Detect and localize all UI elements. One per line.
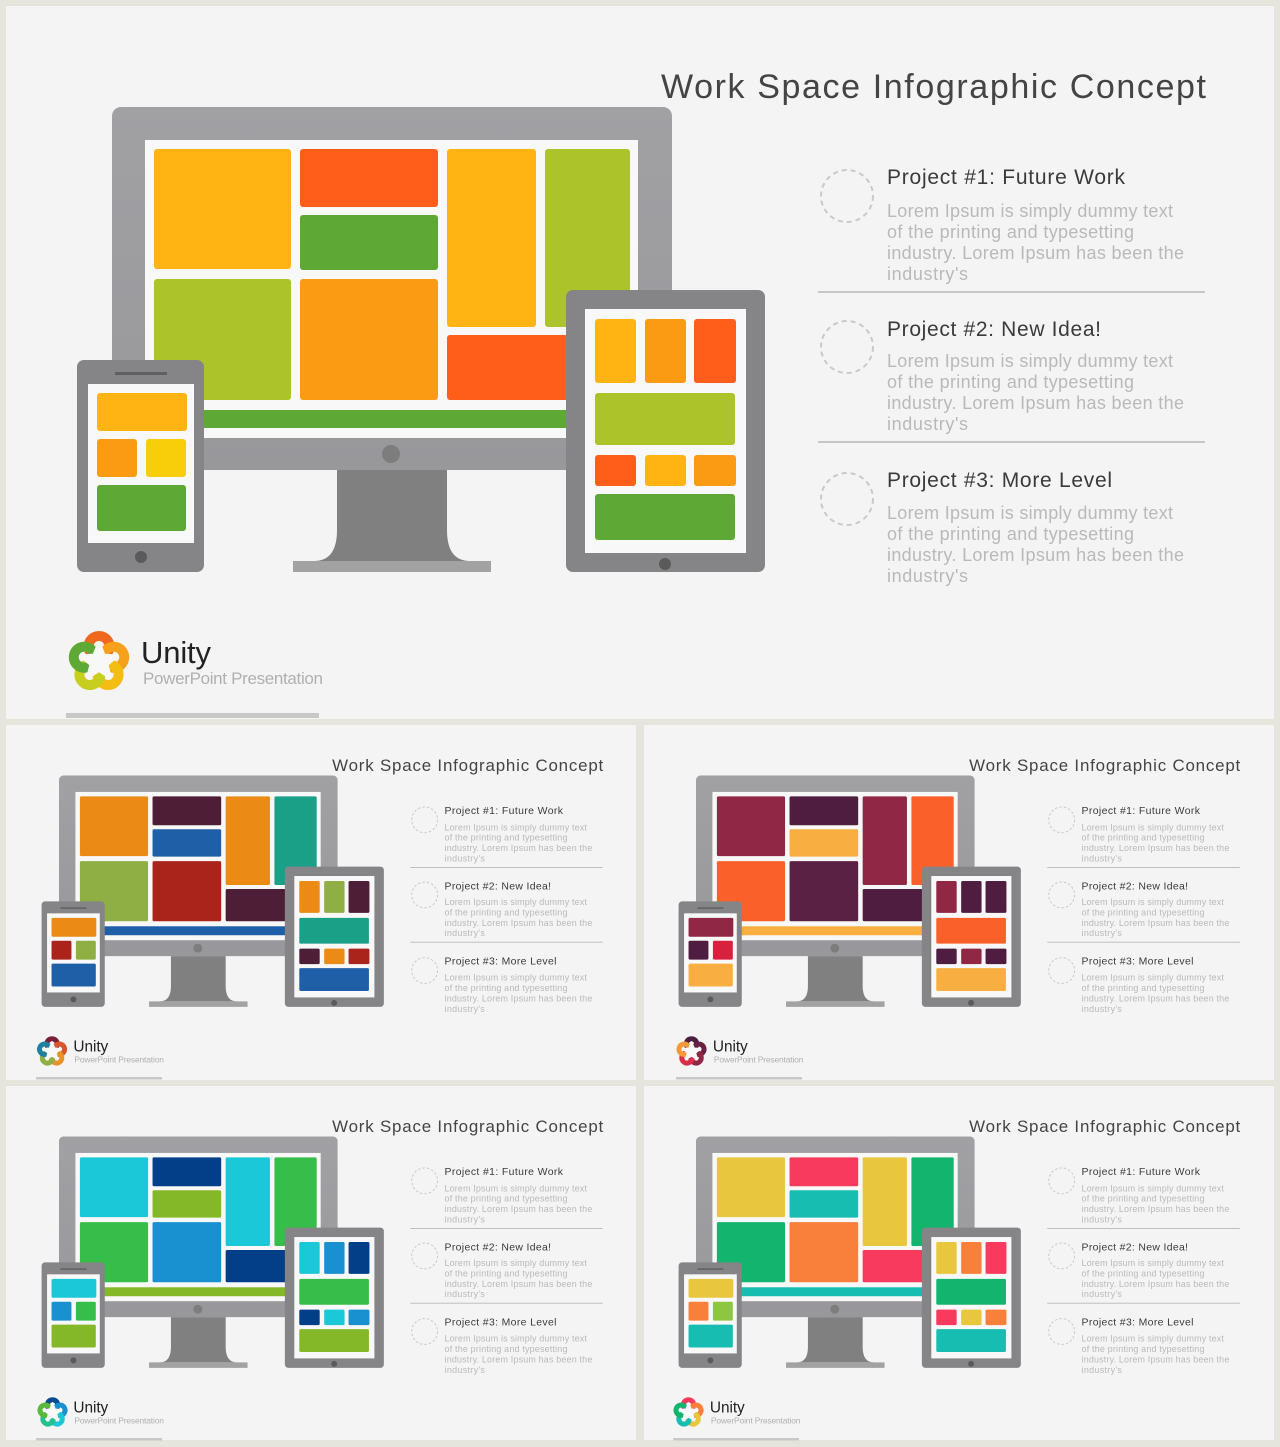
project 3: of the printing and typesetting: [887, 524, 1134, 544]
project 3: industry. Lorem Ipsum has been the: [887, 545, 1184, 565]
project 3: [821, 469, 1184, 586]
project 3: industry. Lorem Ipsum has been the: [445, 993, 592, 1003]
project 3: of the printing and typesetting: [1082, 983, 1204, 993]
monitor: [112, 107, 672, 572]
project 3: [412, 957, 592, 1014]
logo: [673, 1400, 801, 1441]
panel: variant slide, maroon palette: [644, 725, 1274, 1080]
project 3: [412, 1318, 592, 1375]
project 2: [1047, 881, 1240, 942]
title: Work Space Infographic Concept: [661, 68, 1207, 106]
project 3: Project #3: More Level: [445, 957, 557, 968]
project 1: Project #1: Future Work: [1082, 1167, 1201, 1178]
project 2: industry's: [887, 414, 968, 434]
project 1: of the printing and typesetting: [1082, 1194, 1204, 1204]
logo: Unity: [73, 1039, 109, 1056]
project 3: [1049, 957, 1229, 1014]
logo: PowerPoint Presentation: [711, 1416, 801, 1426]
project 3: industry's: [887, 566, 968, 586]
project 1: Project #1: Future Work: [445, 806, 564, 817]
phone: [42, 1262, 105, 1368]
project 2: Project #2: New Idea!: [1082, 1242, 1188, 1253]
tablet: [566, 290, 765, 572]
monitor: [696, 1137, 975, 1368]
project 1: Lorem Ipsum is simply dummy text: [1082, 822, 1224, 832]
title: Work Space Infographic Concept: [969, 756, 1241, 775]
title: Work Space Infographic Concept: [969, 1117, 1241, 1136]
project 1: Lorem Ipsum is simply dummy text: [887, 201, 1173, 221]
project 1: of the printing and typesetting: [887, 222, 1134, 242]
logo: [36, 1400, 164, 1441]
project 1: [1047, 1167, 1240, 1229]
project 1: [818, 166, 1205, 292]
logo: [676, 1039, 804, 1080]
logo: PowerPoint Presentation: [74, 1416, 164, 1426]
tablet: [922, 867, 1021, 1007]
project 3: industry's: [1082, 1004, 1122, 1014]
project 1: of the printing and typesetting: [445, 833, 567, 843]
project 2: industry. Lorem Ipsum has been the: [1082, 1279, 1229, 1289]
project 1: industry. Lorem Ipsum has been the: [445, 843, 592, 853]
phone: [679, 1262, 742, 1368]
panel: variant slide, bright multicolour palette: [644, 1086, 1274, 1441]
project 1: industry's: [445, 854, 485, 864]
project 3: industry's: [1082, 1365, 1122, 1375]
logo: PowerPoint Presentation: [143, 669, 323, 688]
project 1: of the printing and typesetting: [1082, 833, 1204, 843]
project 3: Project #3: More Level: [445, 1318, 557, 1329]
project 3: Project #3: More Level: [887, 469, 1112, 492]
project 3: Project #3: More Level: [1082, 1318, 1194, 1329]
monitor: [59, 776, 338, 1007]
project 2: of the printing and typesetting: [445, 907, 567, 917]
logo: PowerPoint Presentation: [714, 1055, 804, 1065]
project 1: [410, 806, 603, 868]
project 3: Lorem Ipsum is simply dummy text: [1082, 1334, 1224, 1344]
project 2: [1047, 1242, 1240, 1303]
project 2: of the printing and typesetting: [1082, 1268, 1204, 1278]
project 2: Lorem Ipsum is simply dummy text: [887, 351, 1173, 371]
logo: [36, 1039, 164, 1080]
project 3: Project #3: More Level: [1082, 957, 1194, 968]
project 3: Lorem Ipsum is simply dummy text: [445, 1334, 587, 1344]
project 2: [818, 318, 1205, 442]
project 2: Project #2: New Idea!: [887, 318, 1101, 341]
phone: [42, 901, 105, 1007]
project 1: industry. Lorem Ipsum has been the: [887, 243, 1184, 263]
project 2: industry's: [1082, 1289, 1122, 1299]
project 3: of the printing and typesetting: [445, 1344, 567, 1354]
project 1: industry's: [445, 1215, 485, 1225]
project 3: industry's: [445, 1004, 485, 1014]
project 2: industry's: [445, 1289, 485, 1299]
project 1: [1047, 806, 1240, 868]
project 3: industry. Lorem Ipsum has been the: [445, 1354, 592, 1364]
project 2: Project #2: New Idea!: [445, 1242, 551, 1253]
monitor: [696, 776, 975, 1007]
project 1: industry. Lorem Ipsum has been the: [1082, 1204, 1229, 1214]
project 3: Lorem Ipsum is simply dummy text: [887, 503, 1173, 523]
panel: main slide: [6, 6, 1274, 719]
project 1: industry's: [887, 264, 968, 284]
project 1: [410, 1167, 603, 1229]
project 2: [410, 881, 603, 942]
project 2: industry. Lorem Ipsum has been the: [1082, 918, 1229, 928]
project 2: Lorem Ipsum is simply dummy text: [445, 897, 587, 907]
project 1: Lorem Ipsum is simply dummy text: [445, 1183, 587, 1193]
project 2: of the printing and typesetting: [887, 372, 1134, 392]
logo: Unity: [710, 1400, 745, 1417]
project 1: Project #1: Future Work: [445, 1167, 564, 1178]
phone: [679, 901, 742, 1007]
project 2: industry. Lorem Ipsum has been the: [445, 1279, 592, 1289]
project 1: industry's: [1082, 854, 1122, 864]
project 2: Lorem Ipsum is simply dummy text: [445, 1258, 587, 1268]
tablet: [922, 1228, 1021, 1368]
project 2: industry's: [445, 928, 485, 938]
project 1: Lorem Ipsum is simply dummy text: [445, 822, 587, 832]
project 2: industry. Lorem Ipsum has been the: [887, 393, 1184, 413]
title: Work Space Infographic Concept: [332, 756, 604, 775]
project 1: Project #1: Future Work: [887, 166, 1126, 189]
project 3: [1049, 1318, 1229, 1375]
phone: [77, 360, 204, 572]
logo: [66, 635, 323, 718]
monitor: [59, 1137, 338, 1368]
project 3: Lorem Ipsum is simply dummy text: [1082, 973, 1224, 983]
project 2: Project #2: New Idea!: [445, 881, 551, 892]
project 2: industry. Lorem Ipsum has been the: [445, 918, 592, 928]
project 3: Lorem Ipsum is simply dummy text: [445, 973, 587, 983]
project 1: industry's: [1082, 1215, 1122, 1225]
project 2: of the printing and typesetting: [445, 1268, 567, 1278]
tablet: [285, 1228, 384, 1368]
logo: Unity: [141, 635, 212, 670]
panel: variant slide, warm and blue palette: [6, 725, 636, 1080]
project 1: Lorem Ipsum is simply dummy text: [1082, 1183, 1224, 1193]
project 2: Lorem Ipsum is simply dummy text: [1082, 1258, 1224, 1268]
project 3: of the printing and typesetting: [445, 983, 567, 993]
logo: Unity: [713, 1039, 748, 1056]
project 2: [410, 1242, 603, 1303]
title: Work Space Infographic Concept: [332, 1117, 604, 1136]
project 2: industry's: [1082, 928, 1122, 938]
project 1: Project #1: Future Work: [1082, 806, 1201, 817]
project 2: of the printing and typesetting: [1082, 907, 1204, 917]
project 3: industry's: [445, 1365, 485, 1375]
project 1: industry. Lorem Ipsum has been the: [1082, 843, 1229, 853]
project 2: Lorem Ipsum is simply dummy text: [1082, 897, 1224, 907]
tablet: [285, 867, 384, 1007]
project 3: industry. Lorem Ipsum has been the: [1082, 993, 1229, 1003]
panel: variant slide, cyan and green palette: [6, 1086, 636, 1441]
project 1: industry. Lorem Ipsum has been the: [445, 1204, 592, 1214]
logo: Unity: [73, 1400, 109, 1417]
logo: PowerPoint Presentation: [74, 1055, 164, 1065]
project 2: Project #2: New Idea!: [1082, 881, 1188, 892]
project 1: of the printing and typesetting: [445, 1194, 567, 1204]
project 3: of the printing and typesetting: [1082, 1344, 1204, 1354]
project 3: industry. Lorem Ipsum has been the: [1082, 1354, 1229, 1364]
